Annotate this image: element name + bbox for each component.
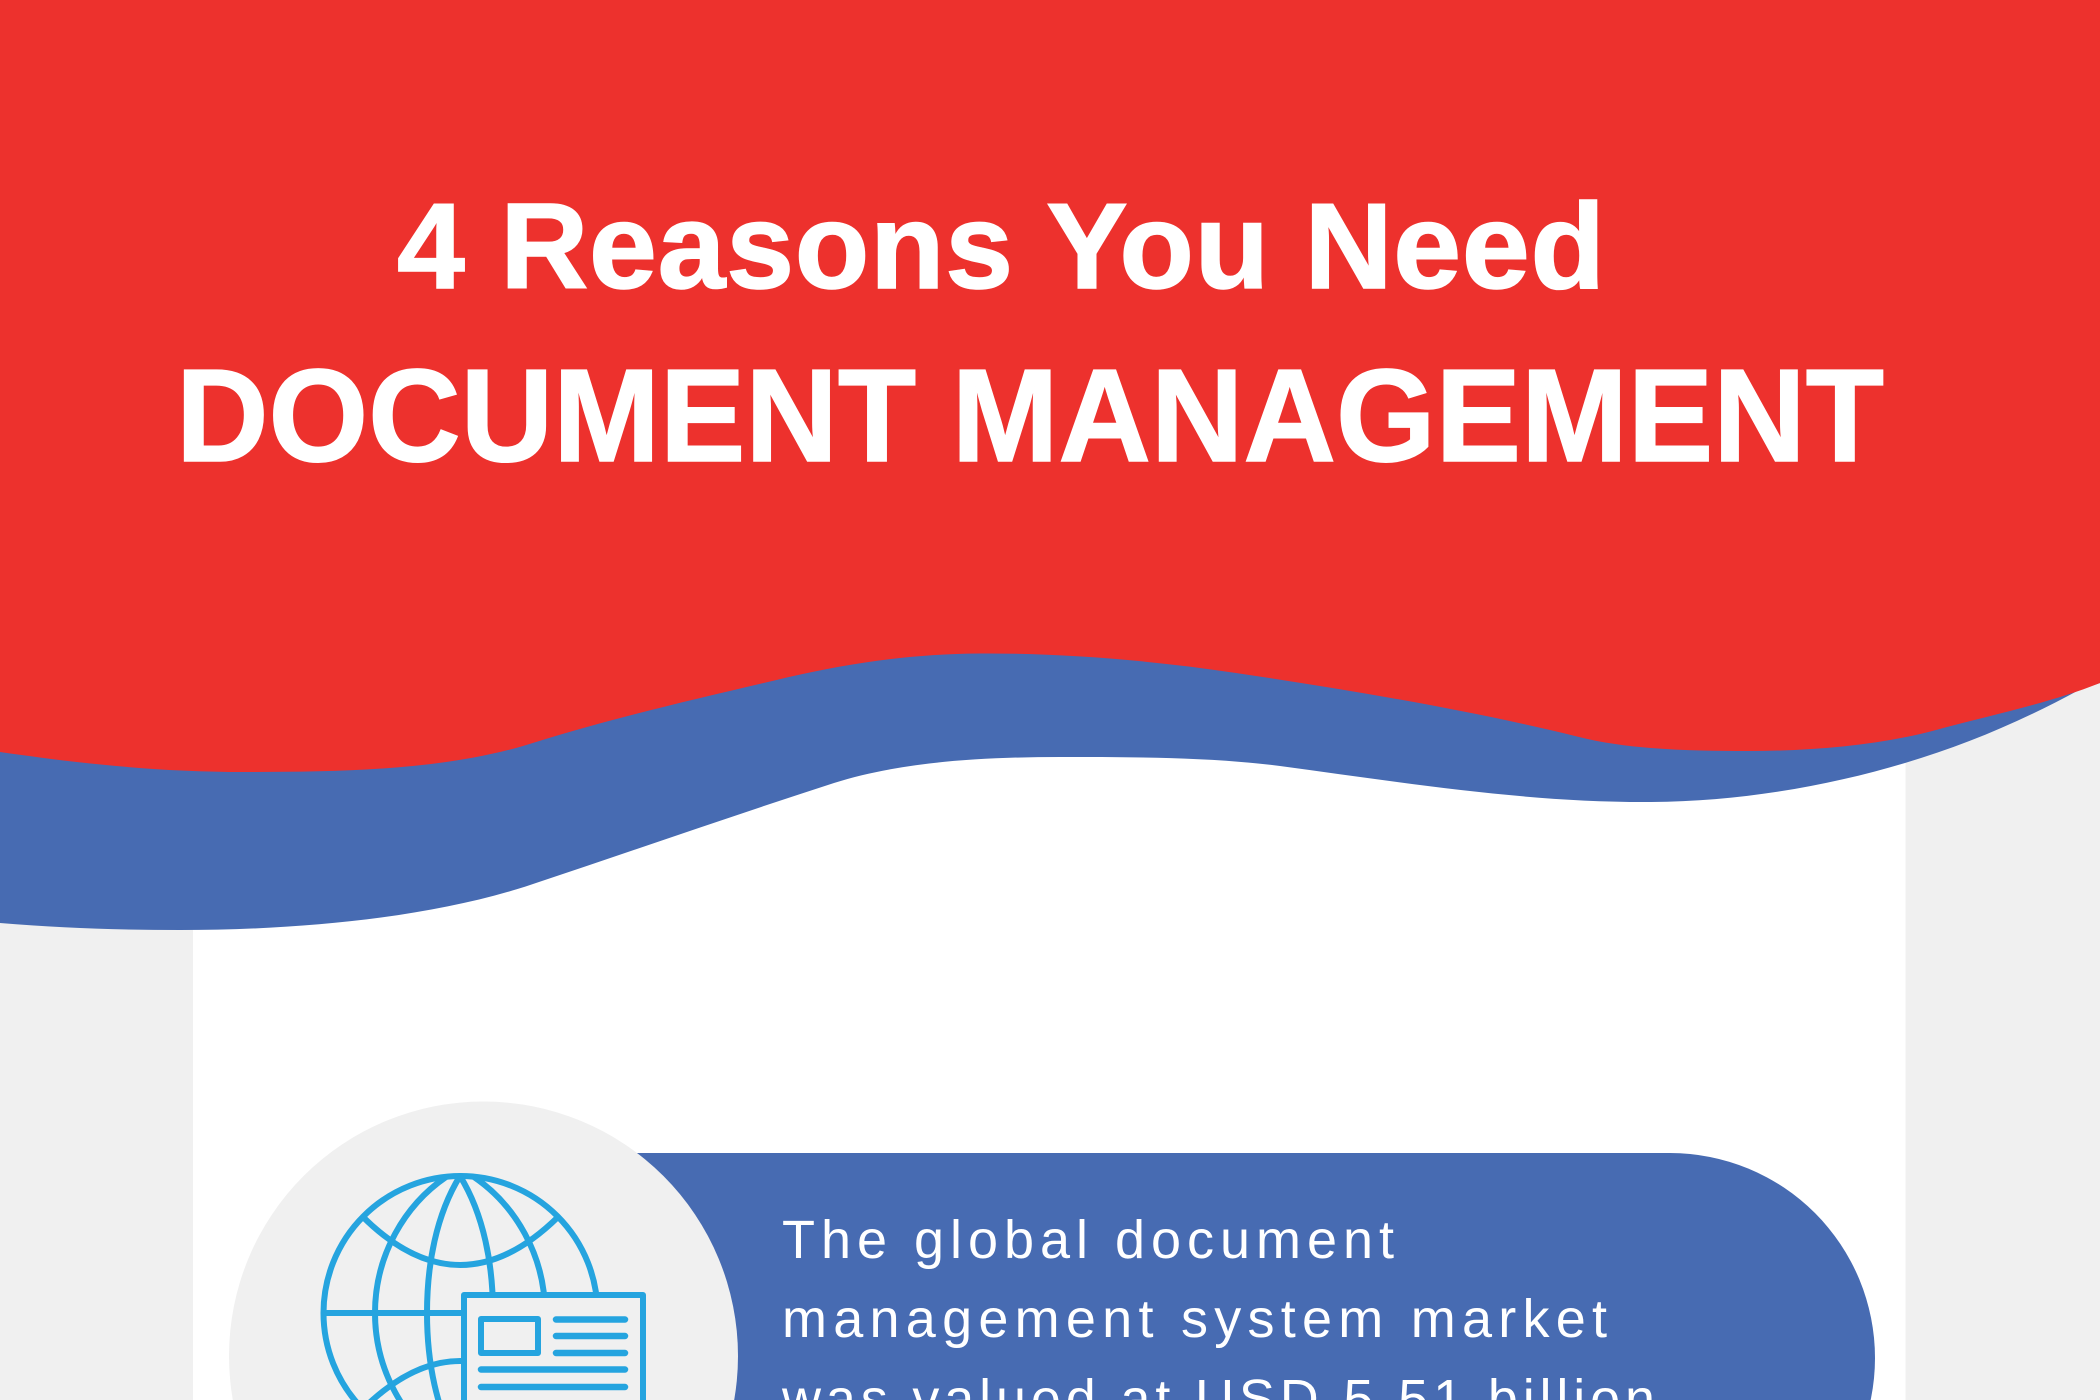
red header wave	[0, 0, 2100, 772]
globe equator	[324, 1310, 470, 1316]
blue wave	[0, 600, 2100, 930]
statistic text	[781, 1210, 1655, 1400]
blue statistic pill	[480, 1153, 1875, 1400]
document image box	[481, 1319, 538, 1353]
document sheet	[464, 1295, 643, 1400]
title line 1: 4 Reasons You Need	[397, 178, 1605, 314]
statistic line 1: The global document	[782, 1210, 1394, 1270]
document text lines	[481, 1320, 625, 1387]
white content panel	[193, 600, 1906, 1400]
globe outer meridians	[375, 1177, 545, 1400]
grey icon circle	[229, 1102, 738, 1400]
title	[176, 178, 1884, 489]
globe lower latitude	[363, 1361, 558, 1400]
globe inner meridians	[427, 1176, 493, 1400]
icon: globe with document	[324, 1176, 643, 1400]
globe upper latitude	[363, 1217, 558, 1265]
title line 2: DOCUMENT MANAGEMENT	[176, 342, 1884, 489]
globe outline	[324, 1176, 598, 1400]
statistic line 2: management system market	[782, 1289, 1607, 1349]
